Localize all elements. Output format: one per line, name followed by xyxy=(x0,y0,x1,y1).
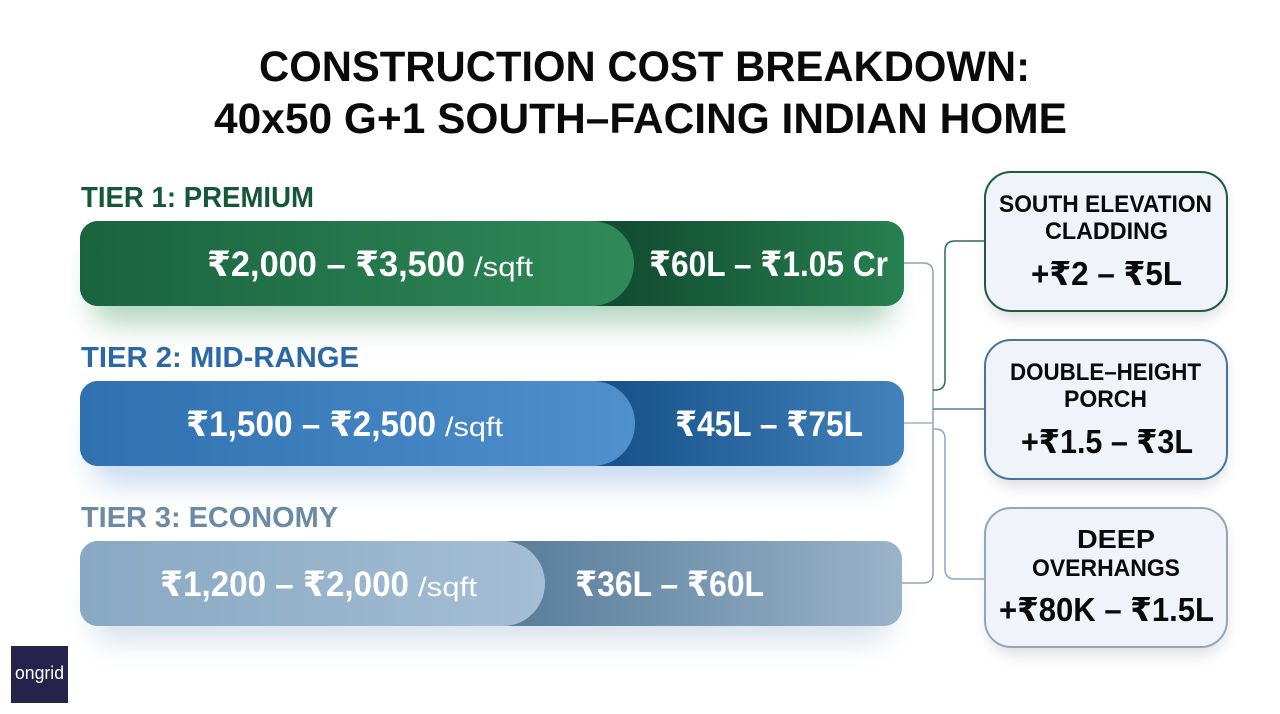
tier 2 heading: TIER 2: MID-RANGE xyxy=(81,342,359,374)
title: CONSTRUCTION COST BREAKDOWN: xyxy=(259,43,1030,91)
panel: tier 3 economy xyxy=(80,502,902,642)
tier 2 rate per sqft: /sqft xyxy=(445,412,504,442)
panel: tier 2 mid-range xyxy=(80,342,904,484)
callout: south elevation cladding: SOUTH ELEVATION xyxy=(999,191,1212,218)
tier 3 rate per sqft: /sqft xyxy=(418,572,478,602)
tier 1 rate per sqft: /sqft xyxy=(474,252,534,282)
panel: tier 1 premium xyxy=(80,182,904,324)
tier 3 heading: TIER 3: ECONOMY xyxy=(81,502,338,534)
title xyxy=(214,43,1067,143)
tier 1 heading: TIER 1: PREMIUM xyxy=(81,182,314,214)
callout: deep overhangs xyxy=(985,508,1227,655)
callout: double-height porch: PORCH xyxy=(1064,386,1147,413)
tier 1 rate per sqft: ₹2,000 – ₹3,500 xyxy=(207,245,465,284)
tier 3 bar xyxy=(80,541,902,626)
callout: deep overhangs: DEEP xyxy=(1077,524,1155,554)
tier 2 rate per sqft: ₹1,500 – ₹2,500 xyxy=(186,405,436,444)
tier 2 total cost: ₹45L – ₹75L xyxy=(675,405,863,444)
callout: south elevation cladding xyxy=(985,172,1227,319)
callout: double-height porch xyxy=(985,340,1227,487)
logo: ongrid xyxy=(11,646,68,703)
title: 40x50 G+1 SOUTH–FACING INDIAN HOME xyxy=(214,95,1067,143)
tier 2 bar xyxy=(80,381,904,466)
tier 1 bar xyxy=(80,221,904,306)
connector lines xyxy=(902,241,985,583)
callout: south elevation cladding: CLADDING xyxy=(1045,218,1168,245)
tier 1 total cost: ₹60L – ₹1.05 Cr xyxy=(649,245,888,284)
logo: ongrid: ongrid xyxy=(15,662,64,683)
callout: south elevation cladding: +₹2 – ₹5L xyxy=(1031,255,1182,292)
callout: deep overhangs: +₹80K – ₹1.5L xyxy=(999,591,1214,628)
callout: double-height porch: DOUBLE–HEIGHT xyxy=(1010,359,1201,386)
tier 3 total cost: ₹36L – ₹60L xyxy=(575,565,764,604)
tier 3 rate per sqft: ₹1,200 – ₹2,000 xyxy=(160,565,409,604)
callout: double-height porch: +₹1.5 – ₹3L xyxy=(1021,423,1193,460)
callout: deep overhangs: OVERHANGS xyxy=(1032,555,1180,582)
